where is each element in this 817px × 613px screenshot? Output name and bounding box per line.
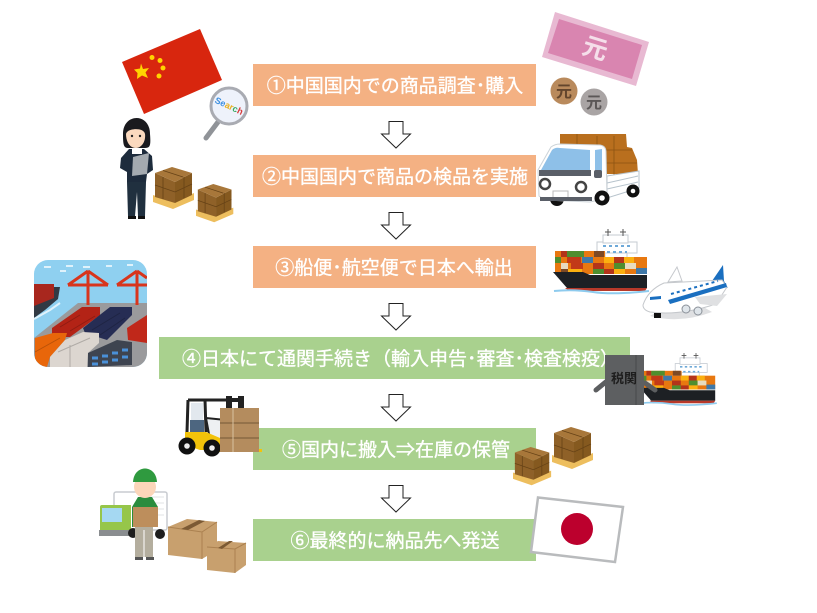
step 1 bar: [253, 64, 536, 106]
step 2 bar: [253, 155, 536, 197]
icon: airplane: [643, 265, 728, 319]
icon: delivery truck and worker: [99, 468, 167, 560]
icon: inspector woman: [120, 118, 153, 219]
step 4 bar: [159, 337, 630, 379]
arrow 4: [382, 394, 410, 421]
step 1 label: ①中国国内での商品調査･購入: [267, 75, 523, 97]
icon: Japanese flag: [531, 498, 623, 562]
arrow 5: [382, 486, 410, 512]
icon: yuan banknote: 元: [579, 32, 611, 66]
icon: forklift: [178, 396, 262, 456]
icon: yuan banknote: [542, 12, 649, 86]
icon: loaded truck: [538, 134, 640, 206]
step 3 label: ③船便･航空便で日本へ輸出: [275, 257, 513, 279]
icon: yuan coins: 元: [556, 84, 572, 101]
icon: yuan coins: [550, 78, 608, 116]
step 3 bar: [253, 246, 536, 288]
icon: magnifying glass: [206, 88, 247, 138]
icon: China flag: [122, 29, 222, 114]
icon: cardboard boxes: [168, 519, 246, 573]
step 6 label: ⑥最終的に納品先へ発送: [290, 530, 500, 552]
icon: yuan coins: 元: [586, 95, 602, 112]
step 2 label: ②中国国内で商品の検品を実施: [262, 166, 528, 188]
arrow 2: [382, 212, 410, 239]
step 5 bar: [253, 428, 536, 470]
icon: container port: [34, 260, 147, 367]
step 5 label: ⑤国内に搬入⇒在庫の保管: [282, 439, 510, 461]
icon: magnifying glass: Search: [213, 95, 245, 117]
icon: customs gate: 税関: [611, 371, 637, 386]
icon: container ship: [553, 229, 649, 293]
step 4 label: ④日本にて通関手続き（輸入申告･審査･検査検疫）: [182, 348, 619, 370]
icon: pallet boxes left: [153, 167, 233, 222]
arrow 1: [382, 122, 410, 148]
icon: second container ship: [640, 353, 717, 405]
step 6 bar: [253, 519, 536, 561]
arrow 3: [382, 304, 410, 330]
icon: customs gate: [596, 355, 655, 405]
icon: pallet boxes right: [513, 427, 593, 485]
